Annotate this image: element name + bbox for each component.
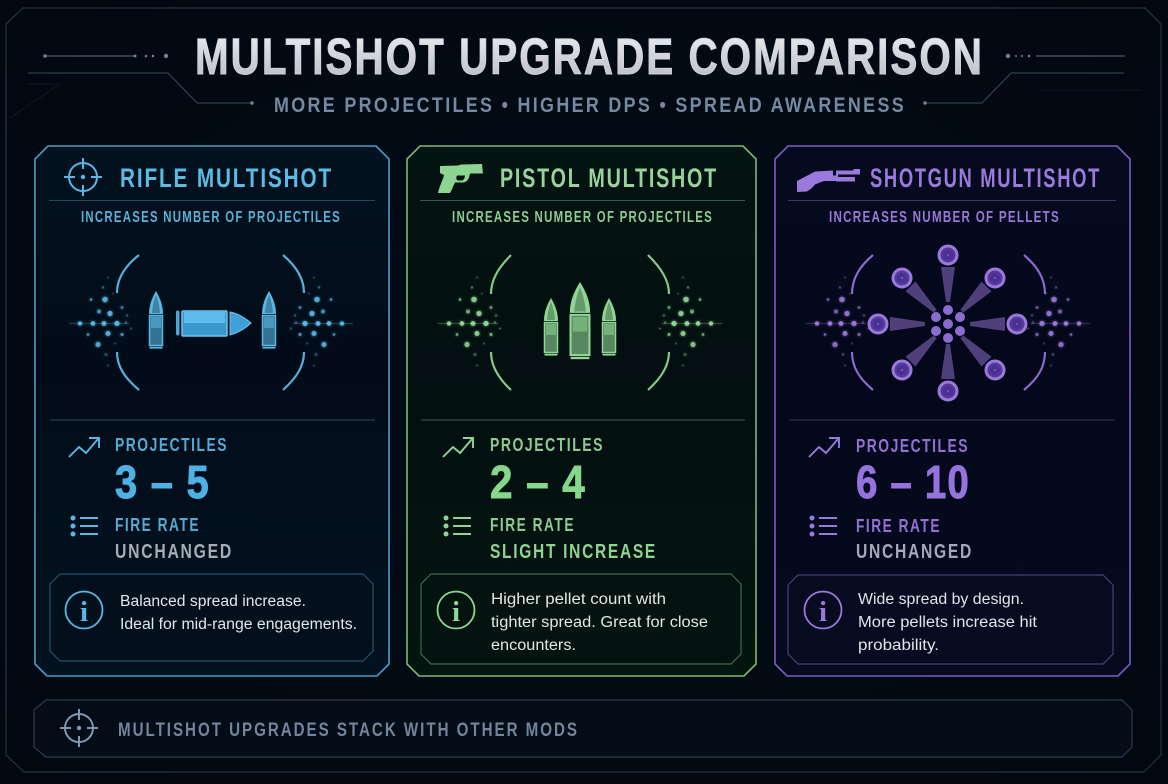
callout: rifle note: i bbox=[80, 596, 88, 628]
fire rate value: UNCHANGED bbox=[856, 540, 973, 563]
icon: pistol bbox=[438, 164, 483, 193]
fire rate label: FIRE RATE bbox=[115, 514, 200, 535]
icon: trend arrow bbox=[809, 438, 839, 457]
icon: list bbox=[444, 516, 471, 536]
callout: shotgun note: i bbox=[819, 596, 827, 628]
icon: trend arrow bbox=[69, 438, 99, 457]
callout: pistol note: tighter spread. Great for close bbox=[491, 614, 708, 631]
header decoration: right bbox=[923, 54, 1140, 105]
icon: trend arrow bbox=[443, 438, 473, 457]
panel: pistol multishot bbox=[407, 146, 756, 676]
callout: shotgun note: probability. bbox=[858, 637, 939, 654]
icon: list bbox=[72, 516, 98, 536]
callout: shotgun note bbox=[788, 575, 1113, 664]
callout: shotgun note: Wide spread by design. bbox=[858, 591, 1024, 608]
panel: shotgun multishot bbox=[775, 146, 1130, 676]
footer note: MULTISHOT UPGRADES STACK WITH OTHER MODS bbox=[118, 720, 579, 741]
graphic: pistol projectiles bbox=[438, 255, 722, 390]
icon: crosshair bbox=[64, 158, 102, 196]
callout: rifle note: Ideal for mid-range engagements. bbox=[120, 616, 357, 633]
projectiles label: PROJECTILES bbox=[490, 434, 604, 455]
callout: rifle note bbox=[50, 574, 373, 661]
fire rate value: UNCHANGED bbox=[115, 540, 233, 563]
callout: pistol note: encounters. bbox=[491, 637, 576, 654]
fire rate label: FIRE RATE bbox=[856, 515, 941, 536]
callout: shotgun note: More pellets increase hit bbox=[858, 614, 1038, 631]
projectiles value: 2 – 4 bbox=[490, 456, 586, 508]
graphic: rifle projectiles bbox=[69, 255, 353, 390]
icon: list bbox=[810, 516, 837, 536]
callout: pistol note: Higher pellet count with bbox=[491, 591, 666, 608]
heading: pistol multishot: PISTOL MULTISHOT bbox=[500, 163, 718, 193]
icon: shotgun bbox=[797, 169, 860, 192]
projectiles value: 6 – 10 bbox=[856, 456, 970, 508]
fire rate value: SLIGHT INCREASE bbox=[490, 540, 657, 563]
graphic: shotgun pellets bbox=[806, 246, 1090, 400]
rifle description: INCREASES NUMBER OF PROJECTILES bbox=[81, 209, 341, 226]
pistol description: INCREASES NUMBER OF PROJECTILES bbox=[452, 209, 713, 226]
callout: pistol note bbox=[421, 574, 741, 664]
projectiles label: PROJECTILES bbox=[856, 435, 969, 456]
footer bar bbox=[34, 700, 1132, 757]
callout: rifle note: Balanced spread increase. bbox=[120, 593, 306, 610]
header decoration: left bbox=[10, 54, 254, 118]
heading: rifle multishot: RIFLE MULTISHOT bbox=[120, 163, 333, 193]
callout: pistol note: i bbox=[452, 596, 460, 628]
shotgun description: INCREASES NUMBER OF PELLETS bbox=[829, 209, 1060, 226]
title: MULTISHOT UPGRADE COMPARISON bbox=[195, 28, 984, 85]
projectiles label: PROJECTILES bbox=[115, 434, 228, 455]
fire rate label: FIRE RATE bbox=[490, 514, 575, 535]
subtitle: MORE PROJECTILES • HIGHER DPS • SPREAD AWARENESS bbox=[274, 93, 906, 117]
projectiles value: 3 – 5 bbox=[115, 456, 210, 508]
icon: crosshair bbox=[60, 709, 98, 747]
panel: rifle multishot bbox=[35, 146, 389, 676]
